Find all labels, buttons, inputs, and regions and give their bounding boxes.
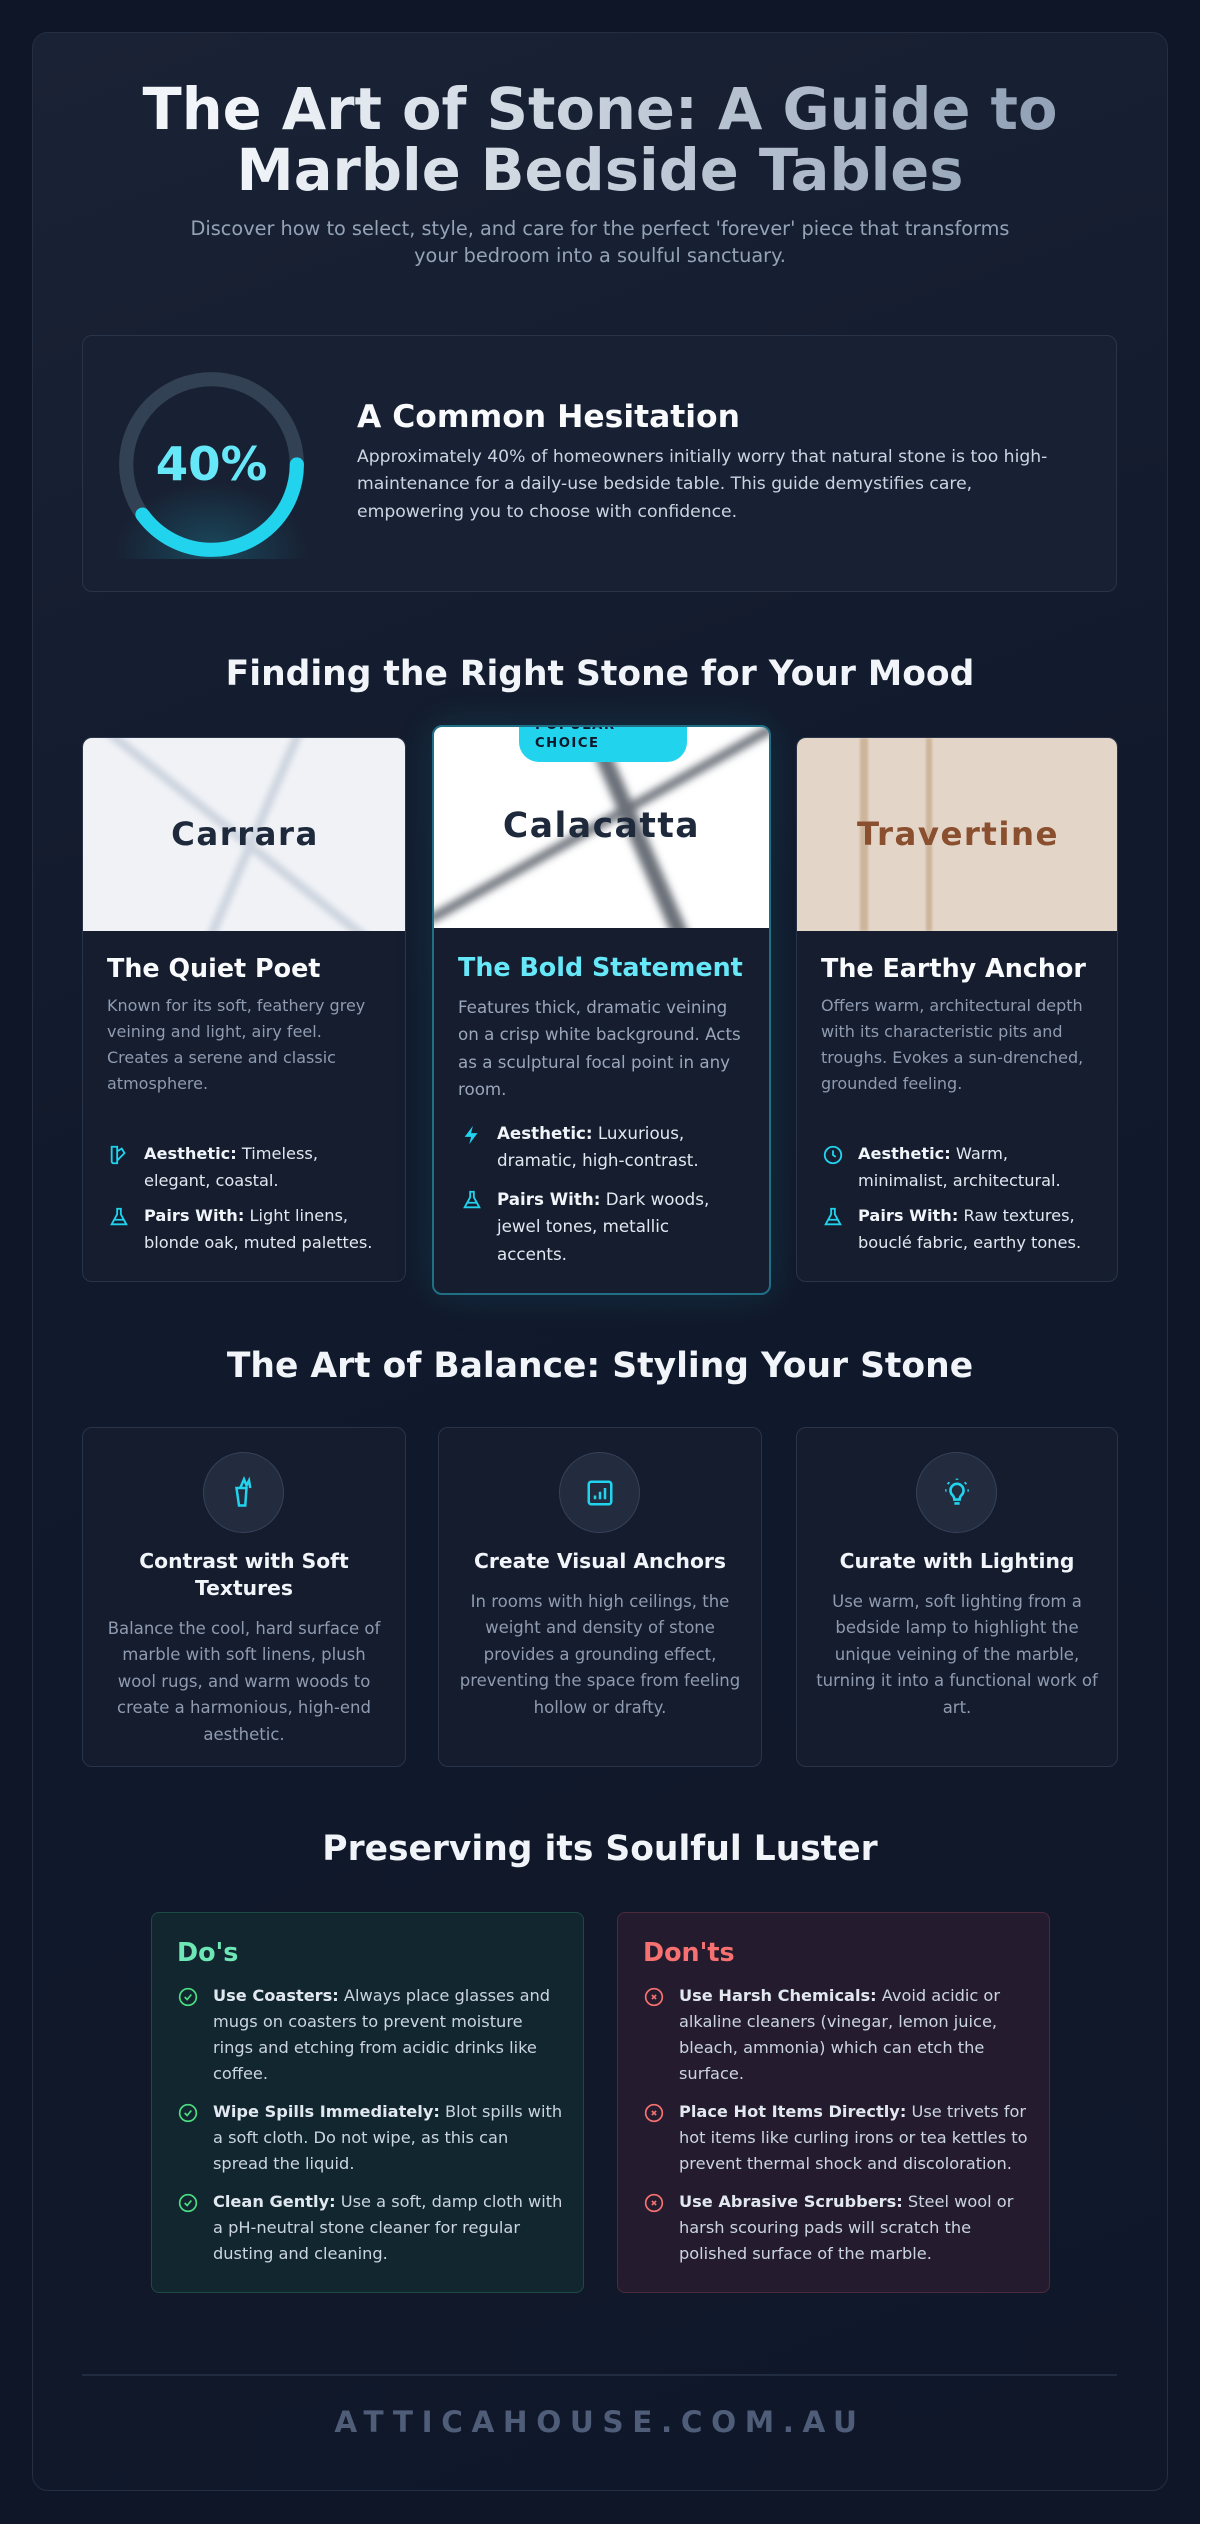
dont item 3: Use Abrasive Scrubbers: Steel wool or harsh scouring pads will scratch the polished surface of the marble. <box>679 2192 1013 2263</box>
tip: anchors: Create Visual Anchors <box>474 1549 726 1573</box>
icon: textures <box>203 1452 284 1533</box>
tip: lighting <box>796 1427 1118 1767</box>
card: Carrara: The Quiet Poet <box>107 953 320 983</box>
panel: dos <box>151 1912 584 2293</box>
badge: popular choice: CHOICE <box>535 736 600 751</box>
icon: chart <box>559 1452 640 1533</box>
do item 1: Use Coasters: Always place glasses and mugs on coasters to prevent moisture rings and etching from acidic drinks like coffee. <box>213 1986 550 2083</box>
card: Travertine: Offers warm, architectural depth with its characteristic pits and troughs. Evokes a sun-drenched, grounded feeling. <box>821 996 1083 1093</box>
card: Calacatta: Features thick, dramatic veining on a crisp white background. Acts as a sculptural focal point in any room. <box>458 997 741 1099</box>
stat text: Approximately 40% of homeowners initially worry that natural stone is too high-maintenance for a daily-use bedside table. This guide demystifies care, empowering you to choose with confidence. <box>357 447 1047 522</box>
panel: donts <box>617 1912 1050 2293</box>
heading: care: Preserving its Soulful Luster <box>322 1829 878 1869</box>
image: carrara <box>83 738 407 931</box>
item: pairs: Pairs With: Dark woods, jewel tones, metallic accents. <box>497 1189 709 1264</box>
item: pairs: Pairs With: Light linens, blonde oak, muted palettes. <box>144 1206 372 1252</box>
tip: lighting: Use warm, soft lighting from a bedside lamp to highlight the unique veining of the marble, turning it into a functional work of art. <box>816 1592 1098 1717</box>
tip: anchors: In rooms with high ceilings, the weight and density of stone provides a grounding effect, preventing the space from feeling hollow or drafty. <box>460 1592 740 1717</box>
tip: textures <box>82 1427 406 1767</box>
tip: anchors <box>438 1427 762 1767</box>
card: Calacatta <box>432 725 771 1295</box>
item: pairs: Pairs With: Raw textures, bouclé fabric, earthy tones. <box>858 1206 1081 1252</box>
stat heading: A Common Hesitation <box>357 399 740 435</box>
icon: bulb <box>916 1452 997 1533</box>
stat number: 40% <box>156 437 267 491</box>
dont item 2: Place Hot Items Directly: Use trivets for hot items like curling irons or tea kettles to prevent thermal shock and discoloration. <box>679 2102 1028 2173</box>
item: aesthetic: Aesthetic: Timeless, elegant, coastal. <box>144 1144 318 1190</box>
panel: donts: Don'ts <box>643 1937 735 1967</box>
image: calacatta: Calacatta <box>503 806 700 846</box>
card: Carrara <box>82 737 406 1282</box>
card: Calacatta: The Bold Statement <box>458 952 743 982</box>
item: aesthetic: Aesthetic: Luxurious, dramatic, high-contrast. <box>497 1123 699 1170</box>
tip: textures: Contrast with Soft Textures <box>139 1549 349 1600</box>
image: carrara: Carrara <box>171 815 319 853</box>
title: Marble Bedside Tables <box>236 137 964 204</box>
heading: styling: The Art of Balance: Styling Your Stone <box>227 1346 973 1386</box>
panel: dos: Do's <box>177 1937 238 1967</box>
badge: popular choice <box>519 721 687 762</box>
heading: stones: Finding the Right Stone for Your Mood <box>226 654 974 694</box>
card: Travertine <box>796 737 1118 1282</box>
image: calacatta <box>434 727 769 928</box>
tip: lighting: Curate with Lighting <box>840 1549 1074 1573</box>
tip: textures: Balance the cool, hard surface of marble with soft linens, plush wool rugs, and warm woods to create a harmonious, high-end aesthetic. <box>108 1619 380 1744</box>
card: Travertine: The Earthy Anchor <box>821 953 1086 983</box>
item: aesthetic: Aesthetic: Warm, minimalist, architectural. <box>858 1144 1061 1190</box>
do item 2: Wipe Spills Immediately: Blot spills with a soft cloth. Do not wipe, as this can spread the liquid. <box>213 2102 562 2173</box>
dont item 1: Use Harsh Chemicals: Avoid acidic or alkaline cleaners (vinegar, lemon juice, bleach, ammonia) which can etch the surface. <box>679 1986 1000 2083</box>
subtitle: Discover how to select, style, and care for the perfect 'forever' piece that transforms your bedroom into a soulful sanctuary. <box>191 217 1009 267</box>
title: The Art of Stone: A Guide to <box>143 76 1057 143</box>
title <box>0 79 1200 201</box>
image: travertine: Travertine <box>857 815 1059 853</box>
ring chart 40% <box>119 372 304 559</box>
do item 3: Clean Gently: Use a soft, damp cloth with a pH-neutral stone cleaner for regular dusting and cleaning. <box>213 2192 562 2263</box>
card: Carrara: Known for its soft, feathery grey veining and light, airy feel. Creates a serene and classic atmosphere. <box>107 996 365 1093</box>
footer: ATTICAHOUSE.COM.AU <box>334 2405 866 2439</box>
image: travertine <box>797 738 1119 931</box>
panel: stat <box>82 335 1117 592</box>
